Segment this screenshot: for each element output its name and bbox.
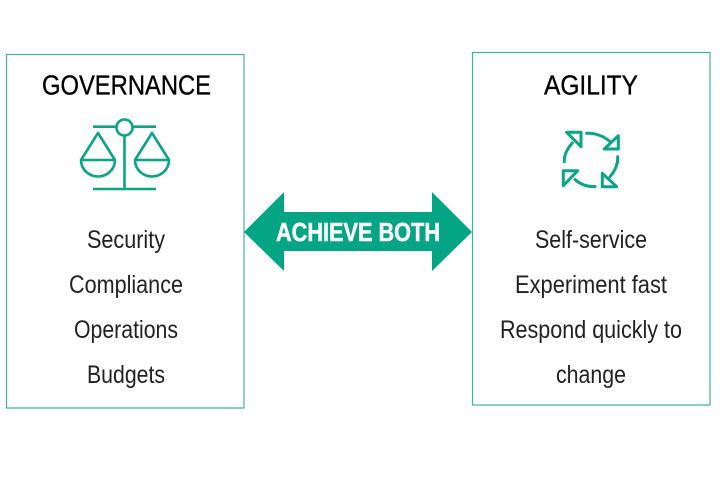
list: governance items (69, 226, 183, 389)
list: agility items: Self-service (535, 226, 647, 254)
list: governance items: Budgets (87, 361, 165, 389)
list: agility items: change (556, 361, 626, 389)
list: governance items: Operations (74, 316, 178, 344)
arrow: achieve both (244, 192, 472, 271)
list: agility items (500, 226, 682, 389)
heading: governance: GOVERNANCE (42, 70, 211, 100)
list: governance items: Compliance (69, 271, 183, 299)
heading: agility: AGILITY (544, 70, 638, 100)
arrow label: ACHIEVE BOTH (276, 217, 440, 247)
panel: agility (472, 52, 710, 405)
panel: governance (6, 54, 244, 408)
icon: cycle arrows (563, 132, 618, 187)
list: agility items: Respond quickly to (500, 316, 682, 344)
icon: balance scales (81, 120, 169, 189)
list: agility items: Experiment fast (515, 271, 667, 299)
list: governance items: Security (87, 226, 165, 254)
